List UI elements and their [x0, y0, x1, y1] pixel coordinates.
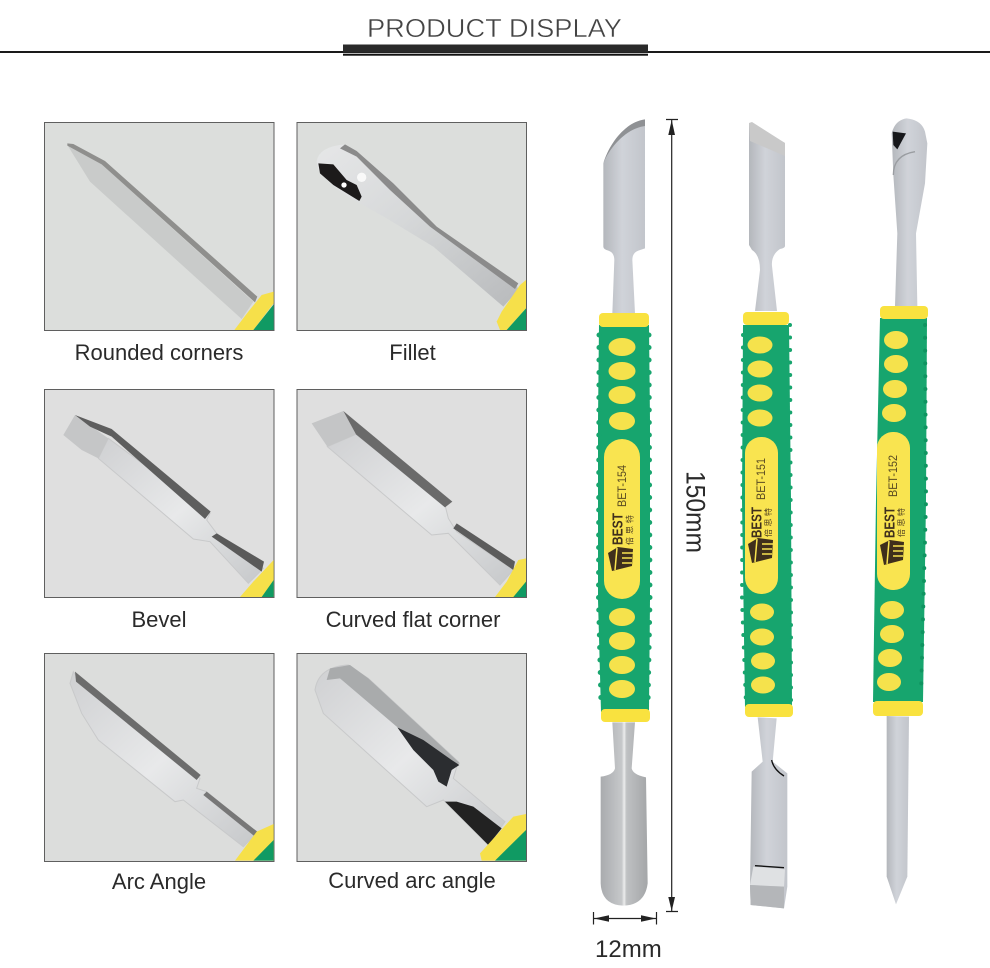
handle body	[598, 325, 650, 712]
header rule and bar	[0, 44, 990, 56]
brand logo	[880, 507, 906, 565]
model number: BET-151	[756, 458, 768, 500]
caption: rounded corners: Rounded corners	[75, 340, 243, 365]
neck edge	[212, 533, 264, 572]
dark edge	[75, 415, 211, 519]
blade	[67, 145, 253, 319]
brand logo: 倍思特	[896, 508, 906, 537]
label area	[604, 439, 640, 599]
handle body	[873, 318, 927, 702]
caption: curved flat corner: Curved flat corner	[326, 607, 500, 632]
dimension arrow: 12mm	[594, 912, 656, 924]
caption: curved arc angle: Curved arc angle	[328, 868, 496, 893]
panel: curved arc angle	[297, 654, 526, 862]
bottom blade	[601, 722, 648, 906]
handle caps	[743, 312, 793, 717]
grip ovals	[608, 338, 636, 698]
brand logo: BEST	[610, 513, 626, 545]
dimension label: 12mm: 12mm	[595, 936, 662, 963]
gray top band	[327, 665, 460, 765]
tool: BET-151	[742, 122, 793, 908]
grip bumps	[921, 325, 926, 695]
top blade	[603, 119, 645, 313]
handle caps	[599, 313, 650, 722]
reflection	[318, 163, 362, 201]
caption: arc angle: Arc Angle	[112, 869, 206, 894]
dimension label: 150mm: 150mm	[680, 471, 710, 553]
panel: fillet	[297, 122, 526, 330]
dark reflection	[397, 727, 459, 787]
handle end	[240, 560, 274, 597]
caption: fillet: Fillet	[389, 340, 436, 365]
label area	[745, 437, 778, 594]
blade bevel edge	[67, 143, 257, 302]
handle end	[495, 558, 526, 597]
brand logo	[608, 513, 634, 571]
handle caps	[873, 306, 928, 716]
spoon blade	[317, 144, 518, 307]
bottom blade	[887, 716, 909, 904]
grip ovals	[877, 331, 908, 691]
caption: bevel: Bevel	[131, 607, 187, 632]
brand logo: 倍思特	[624, 515, 634, 545]
grip bumps	[742, 325, 791, 705]
brand logo	[748, 507, 773, 563]
bottom blade	[750, 717, 787, 908]
top spoon	[892, 118, 927, 306]
top blade	[749, 122, 785, 311]
panel: arc angle	[44, 654, 274, 862]
handle end	[497, 280, 526, 330]
label area	[877, 432, 910, 590]
neck edge	[453, 523, 515, 570]
blade	[70, 672, 257, 847]
dimension arrow: 150mm	[666, 119, 678, 912]
brand logo: BEST	[748, 507, 766, 538]
handle end	[234, 292, 274, 330]
handle body	[742, 325, 792, 707]
grip ovals	[748, 336, 775, 694]
tool: BET-154	[598, 119, 650, 906]
panel: curved flat corner	[297, 390, 526, 598]
dark edge	[343, 411, 452, 507]
tip	[312, 411, 356, 447]
highlights	[341, 173, 366, 188]
model number: BET-154	[617, 464, 629, 507]
panel: rounded corners	[44, 122, 274, 330]
neck edge	[203, 792, 257, 837]
brand logo: 倍思特	[763, 508, 773, 537]
neck dark	[445, 802, 502, 845]
model number: BET-152	[888, 455, 900, 497]
tool: BET-152	[873, 118, 928, 904]
blade	[327, 434, 513, 585]
handle end	[480, 814, 526, 861]
grip bumps	[598, 335, 650, 705]
handle end	[235, 824, 274, 861]
brand logo: BEST	[882, 507, 898, 538]
dark edge	[75, 672, 201, 780]
blade	[315, 665, 505, 845]
panel: bevel	[44, 390, 274, 598]
title: PRODUCT DISPLAY	[367, 13, 622, 43]
spoon edge	[340, 144, 518, 289]
bevel tip	[63, 415, 108, 458]
blade	[98, 438, 263, 583]
